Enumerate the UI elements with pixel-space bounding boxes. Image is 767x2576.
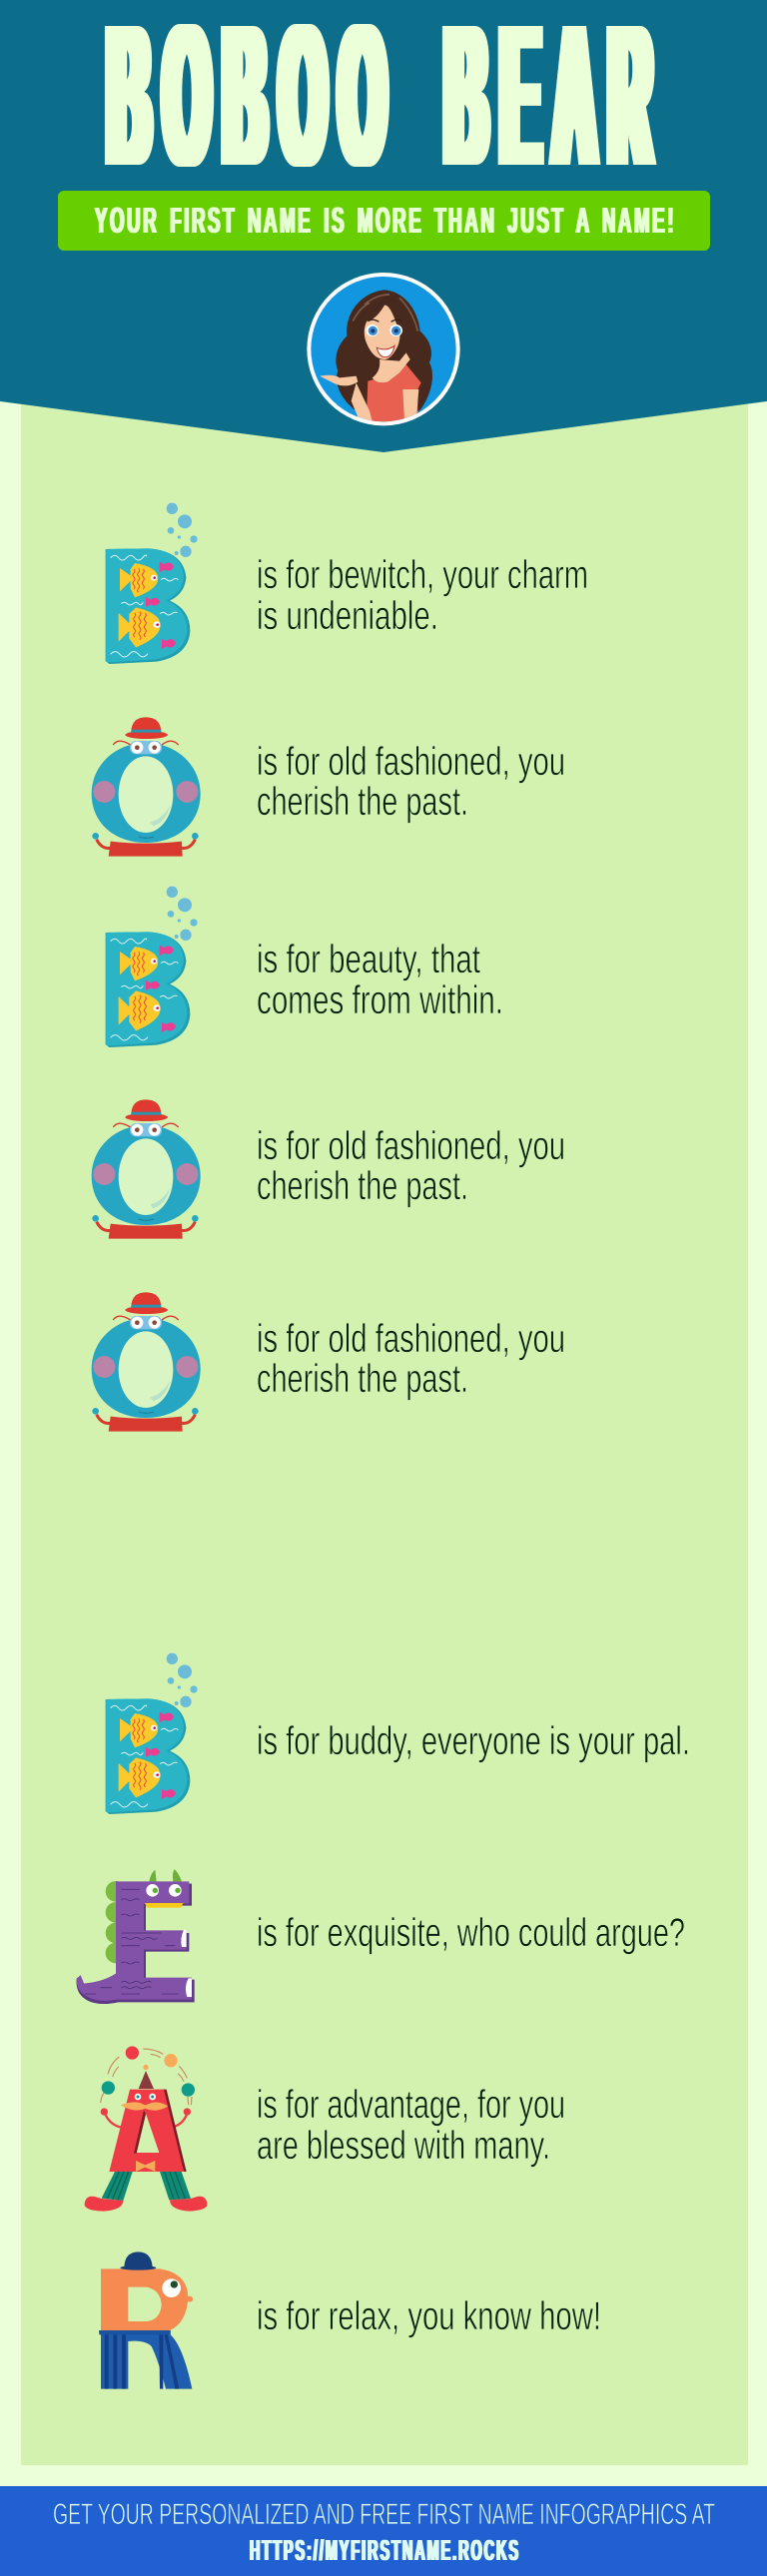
row 7: E icon (purple dragon)	[76, 1869, 195, 2004]
row 2: O icon	[92, 717, 201, 857]
row 3: B icon	[106, 887, 198, 1047]
row 5 text: is for old fashioned, you	[257, 1317, 565, 1361]
row 1 text: is undeniable.	[257, 594, 438, 638]
row 4 text: is for old fashioned, you	[257, 1124, 565, 1168]
row 5 text	[257, 1317, 565, 1401]
row 5 text: cherish the past.	[257, 1357, 468, 1401]
content panel	[21, 379, 748, 2465]
row 6: B icon	[106, 1653, 198, 1814]
row 1: B icon	[106, 503, 198, 664]
row 8 text	[257, 2083, 565, 2168]
row 9: R icon (orange head, blue legs)	[99, 2252, 193, 2389]
row 4 text: cherish the past.	[257, 1164, 468, 1208]
avatar: woman in round frame	[307, 273, 460, 425]
row 2 text: cherish the past.	[257, 780, 468, 824]
row 2 text: is for old fashioned, you	[257, 740, 565, 784]
row 9 text: is for relax, you know how!	[257, 2294, 601, 2338]
row 1 text: is for bewitch, your charm	[257, 553, 588, 597]
row 5: O icon	[92, 1292, 201, 1432]
row 4 text	[257, 1124, 565, 1208]
header banner	[0, 0, 767, 452]
row 1 text	[257, 553, 588, 638]
row 3 text: is for beauty, that	[257, 938, 480, 981]
row 3 text: comes from within.	[257, 978, 503, 1022]
row 8 text: are blessed with many.	[257, 2124, 550, 2168]
row 4: O icon	[92, 1099, 201, 1239]
row 8 text: is for advantage, for you	[257, 2083, 565, 2127]
footer band	[0, 2486, 767, 2576]
row 2 text	[257, 740, 565, 824]
row 8: A icon (juggling clown)	[85, 2046, 208, 2212]
subtitle bar	[58, 191, 710, 251]
row 3 text	[257, 938, 503, 1022]
